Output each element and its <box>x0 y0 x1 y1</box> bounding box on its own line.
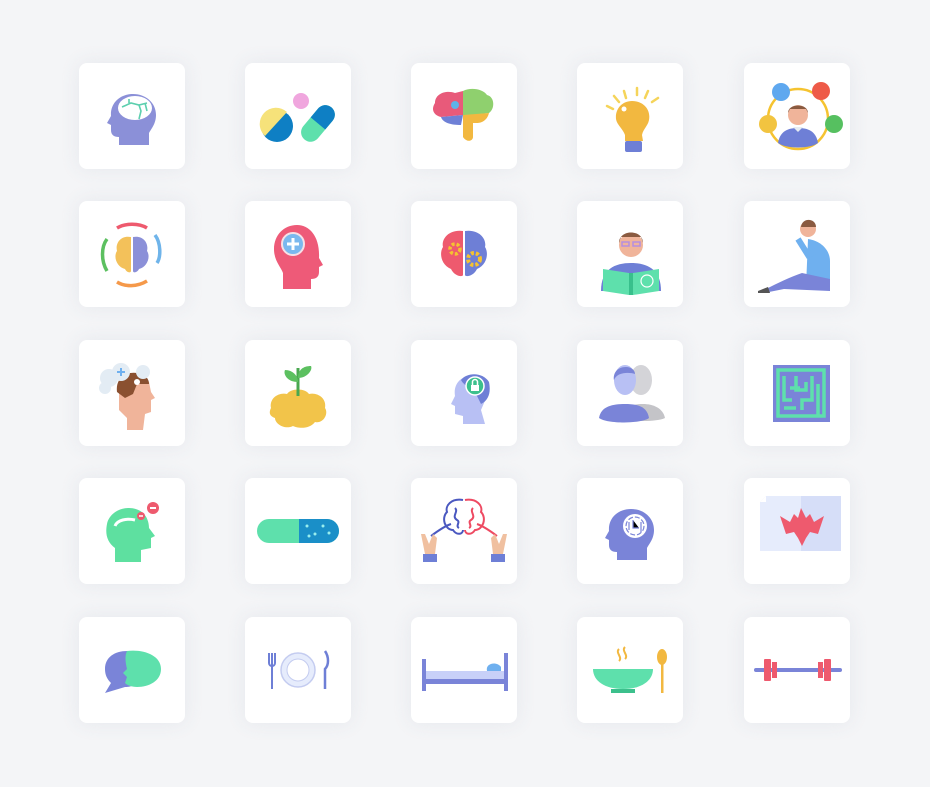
card: brain with gears <box>411 201 517 307</box>
card: puzzle brain <box>411 63 517 169</box>
card: two people <box>577 340 683 446</box>
card: speech bubble heads <box>79 617 185 723</box>
card: head with clouds <box>79 340 185 446</box>
card: head with plus <box>245 201 351 307</box>
card: head with minus <box>79 478 185 584</box>
card: plant brain <box>245 340 351 446</box>
card: moods around person <box>744 63 850 169</box>
card: maze <box>744 340 850 446</box>
card: pills <box>245 63 351 169</box>
card: man reading <box>577 201 683 307</box>
card: sitting man <box>744 201 850 307</box>
card: bed <box>411 617 517 723</box>
card: inkblot <box>744 478 850 584</box>
card: barbell <box>744 617 850 723</box>
card: tangled brain with hands <box>411 478 517 584</box>
card: cycle brain <box>79 201 185 307</box>
card: bowl and spoon <box>577 617 683 723</box>
card: head with brain <box>79 63 185 169</box>
card: bandage <box>245 478 351 584</box>
card: light bulb <box>577 63 683 169</box>
card: plate <box>245 617 351 723</box>
card: head with lock <box>411 340 517 446</box>
card: head with maze <box>577 478 683 584</box>
